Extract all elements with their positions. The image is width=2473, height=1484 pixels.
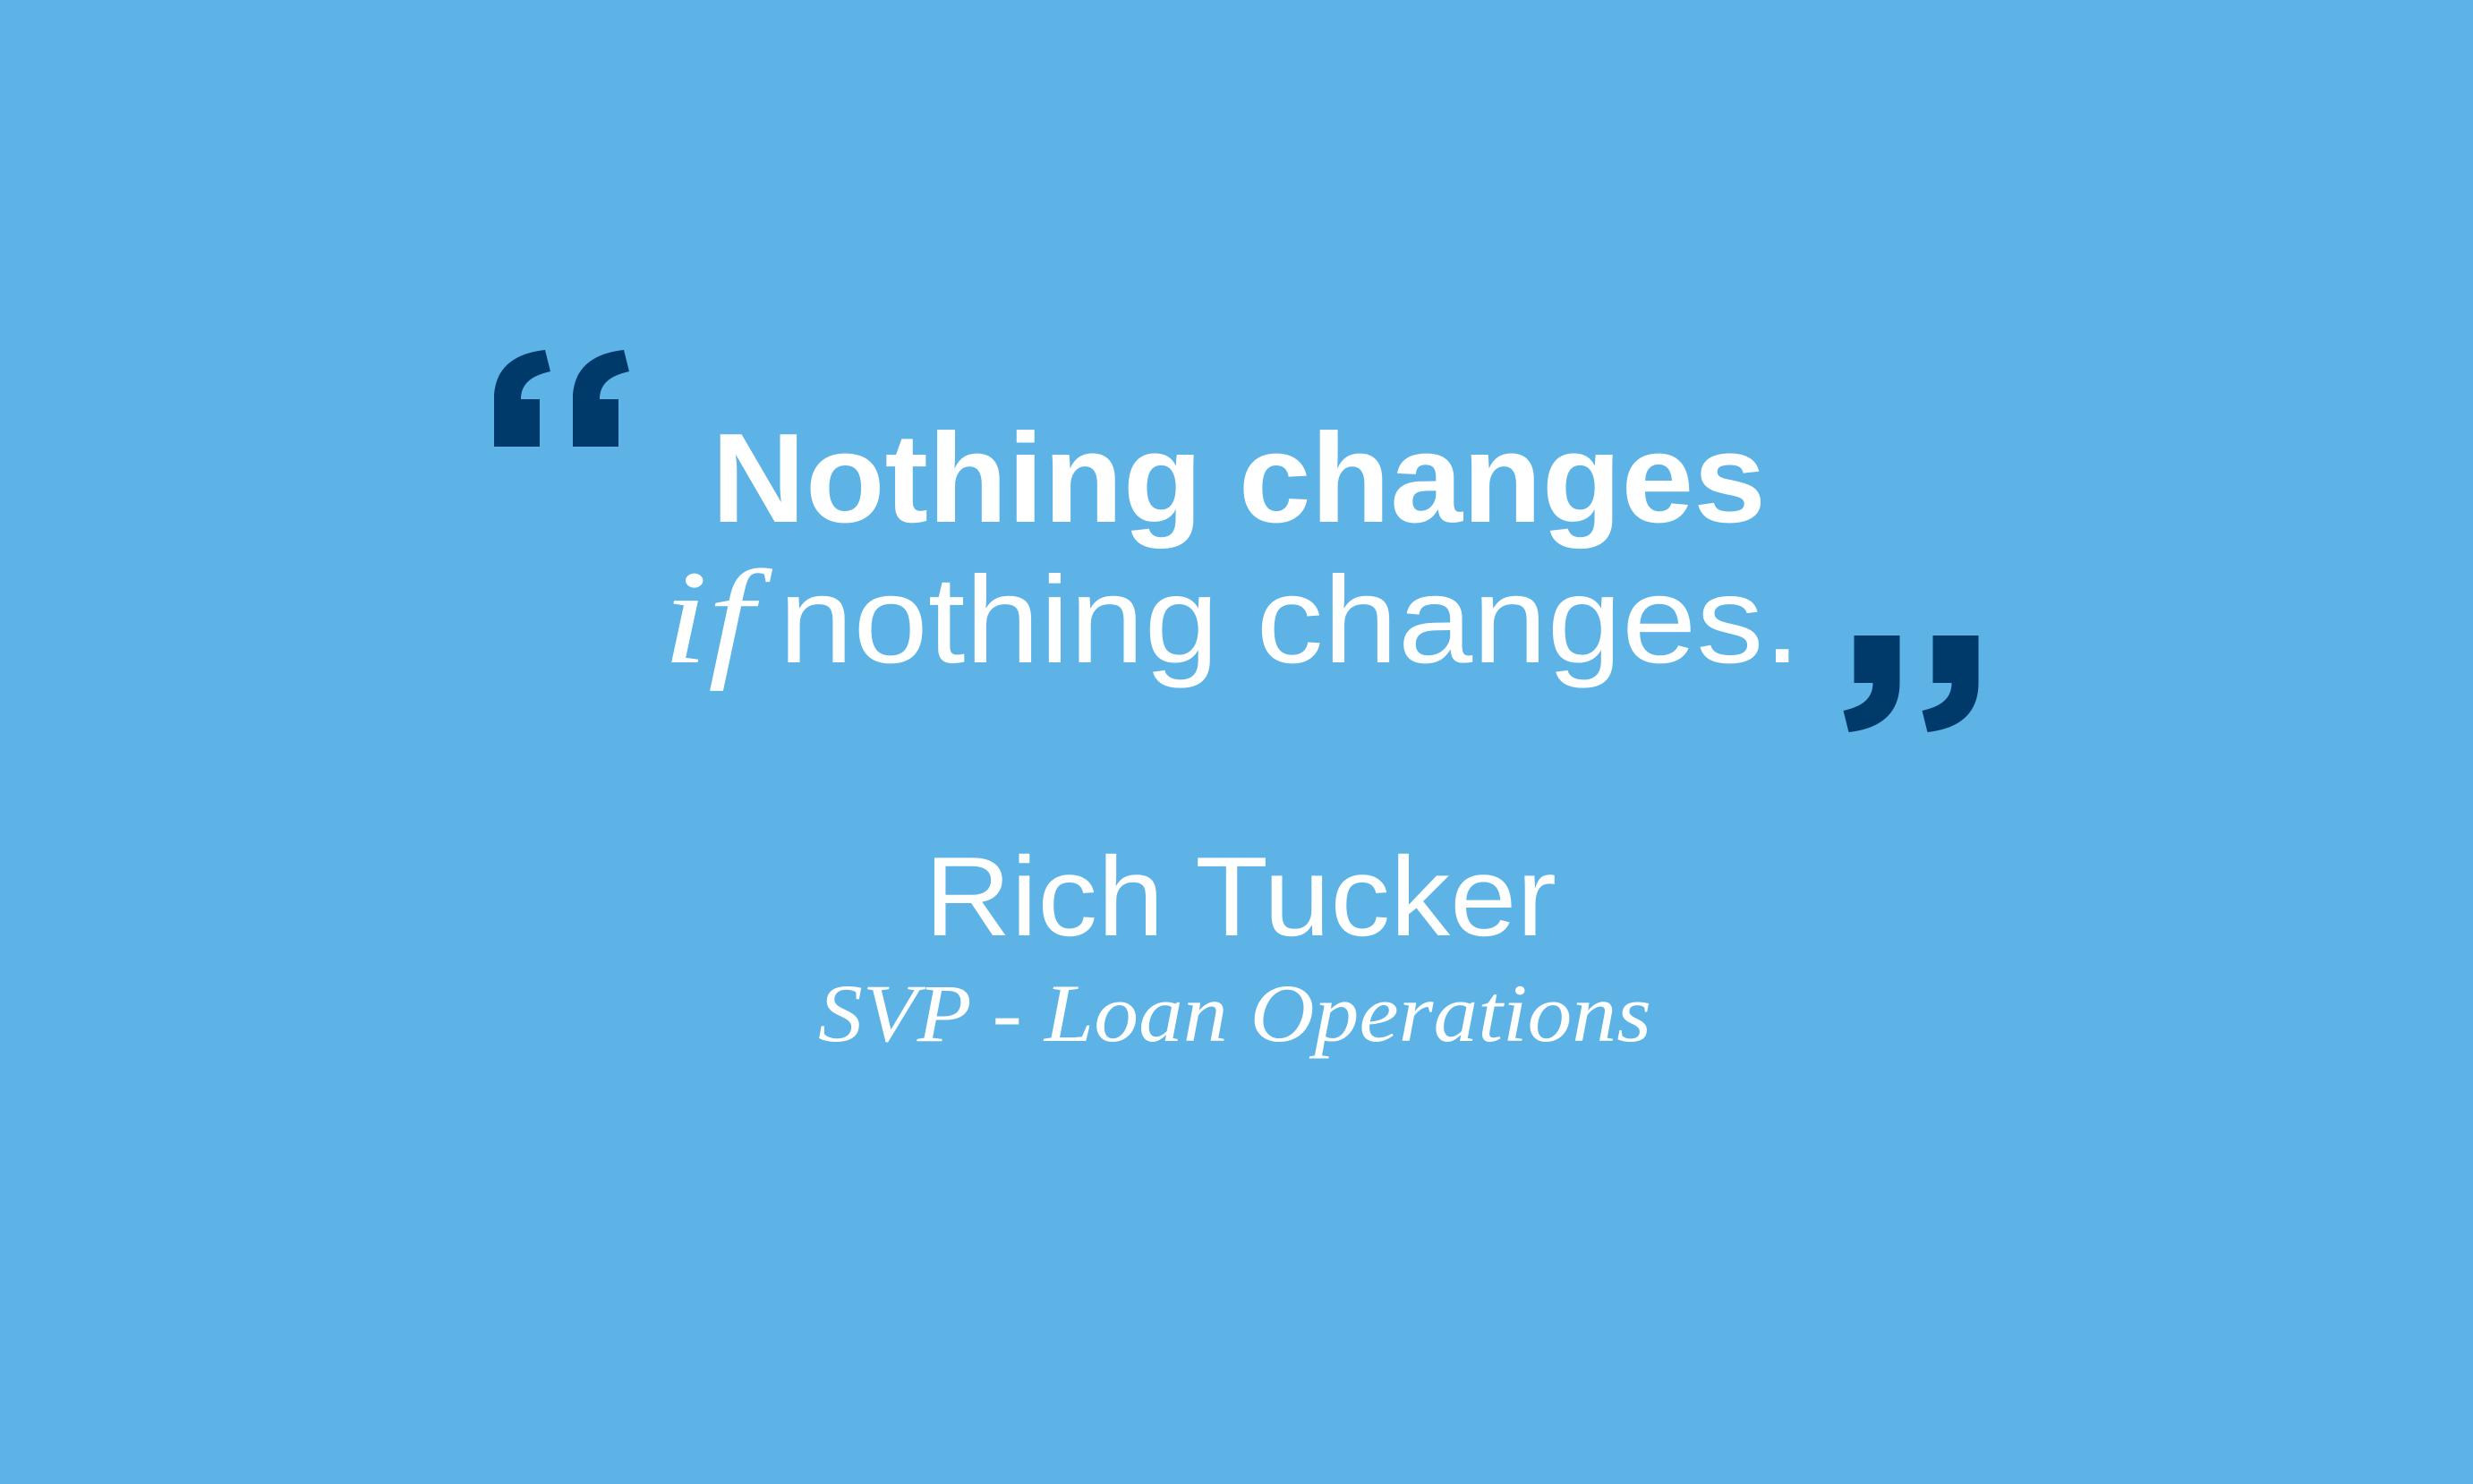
icon: closing quote marks (1844, 635, 1978, 732)
quote line 2: if (662, 543, 772, 692)
author name: Rich Tucker (925, 833, 1556, 959)
author title: SVP - Loan Operations (818, 968, 1651, 1059)
quote line 1: Nothing changes (712, 407, 1766, 550)
icon: opening quote marks (494, 350, 629, 447)
quote line 2: nothing changes. (779, 551, 1801, 689)
